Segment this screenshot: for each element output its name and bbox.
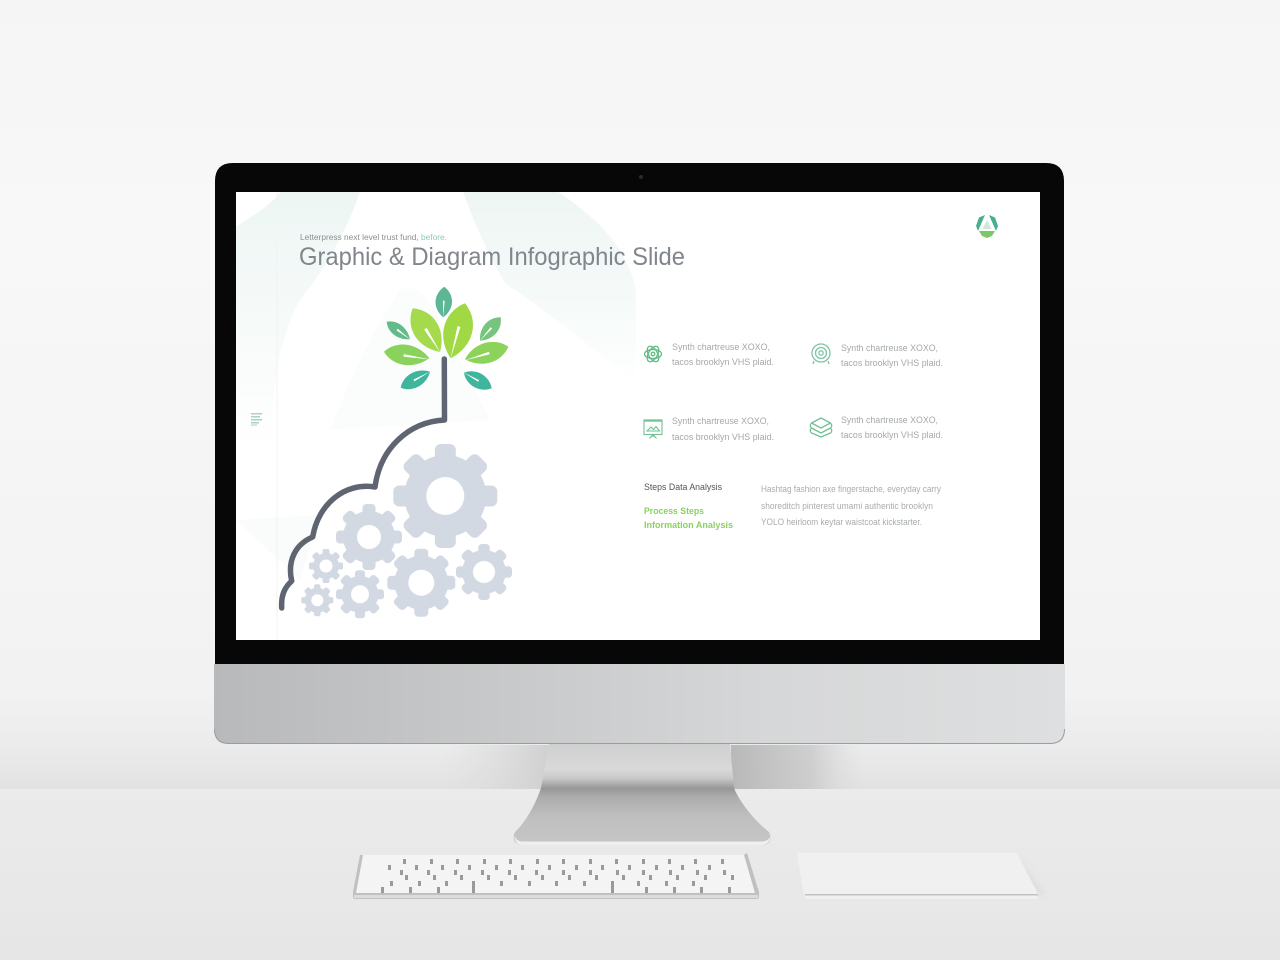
monitor chin bbox=[214, 664, 1065, 744]
keyboard bbox=[353, 853, 759, 899]
stand base rim bbox=[514, 836, 771, 845]
tree trunk and cloud outline bbox=[282, 359, 444, 608]
slide screen bbox=[236, 192, 1040, 640]
icon: presentation board bbox=[644, 420, 662, 438]
gear: middle bbox=[336, 504, 402, 570]
tree leaves bbox=[383, 286, 511, 395]
title: Graphic & Diagram Infographic Slide bbox=[299, 243, 685, 271]
feature text 1: Synth chartreuse XOXO, bbox=[672, 342, 770, 352]
feature text 4: tacos brooklyn VHS plaid. bbox=[841, 430, 943, 440]
gear: large bbox=[393, 444, 497, 548]
leaf: upper left small bbox=[383, 317, 414, 345]
gear: smallest bbox=[301, 584, 333, 616]
paragraph: YOLO heirloom keytar waistcoat kickstarter. bbox=[761, 517, 922, 527]
feature text 1: tacos brooklyn VHS plaid. bbox=[672, 357, 774, 367]
feature text 3 bbox=[672, 416, 774, 442]
feature text 2: tacos brooklyn VHS plaid. bbox=[841, 358, 943, 368]
subtitle: Letterpress next level trust fund, before. bbox=[300, 232, 447, 242]
trackpad bbox=[797, 853, 1046, 899]
leaf: large left bbox=[402, 302, 452, 360]
key gaps bbox=[381, 859, 734, 893]
background mint shapes bbox=[236, 192, 636, 640]
monitor bbox=[214, 163, 1065, 845]
leaf: lower right bbox=[460, 366, 495, 395]
leaf: large right bbox=[437, 300, 479, 363]
paragraph: shoreditch pinterest umami authentic brooklyn bbox=[761, 501, 933, 511]
logo bbox=[976, 215, 998, 238]
monitor bezel bbox=[215, 163, 1064, 664]
feature text 2: Synth chartreuse XOXO, bbox=[841, 343, 938, 353]
gear: right bbox=[456, 544, 512, 600]
feature text 3: Synth chartreuse XOXO, bbox=[672, 416, 769, 426]
icon: atom bbox=[644, 344, 662, 364]
leaf: middle right bbox=[461, 337, 511, 369]
sidebar icon bbox=[251, 413, 262, 426]
feature text 1 bbox=[672, 342, 774, 367]
green subheading bbox=[644, 506, 733, 531]
heading: steps data analysis: Steps Data Analysis bbox=[644, 482, 722, 493]
gear: small centre bbox=[336, 570, 384, 618]
feature text 4: Synth chartreuse XOXO, bbox=[841, 415, 938, 425]
leaf: top bbox=[435, 286, 453, 318]
chin bottom edge bbox=[214, 729, 1064, 744]
leaf: lower left bbox=[397, 365, 434, 394]
leaf: upper right small bbox=[474, 313, 506, 346]
gear: lower centre bbox=[387, 549, 455, 617]
green subheading: Information Analysis bbox=[644, 520, 733, 531]
feature text 4 bbox=[841, 415, 943, 440]
paragraph bbox=[761, 484, 941, 527]
gear: small left bbox=[309, 549, 343, 583]
icon: target bbox=[812, 344, 830, 364]
paragraph: Hashtag fashion axe fingerstache, everyday carry bbox=[761, 484, 941, 494]
gears bbox=[301, 444, 512, 618]
webcam bbox=[639, 175, 643, 179]
green subheading: Process Steps bbox=[644, 506, 704, 517]
feature text 2 bbox=[841, 343, 943, 368]
icon: layers bbox=[810, 418, 832, 437]
feature text 3: tacos brooklyn VHS plaid. bbox=[672, 432, 774, 442]
leaf: middle left bbox=[383, 342, 432, 369]
monitor stand bbox=[514, 744, 771, 845]
